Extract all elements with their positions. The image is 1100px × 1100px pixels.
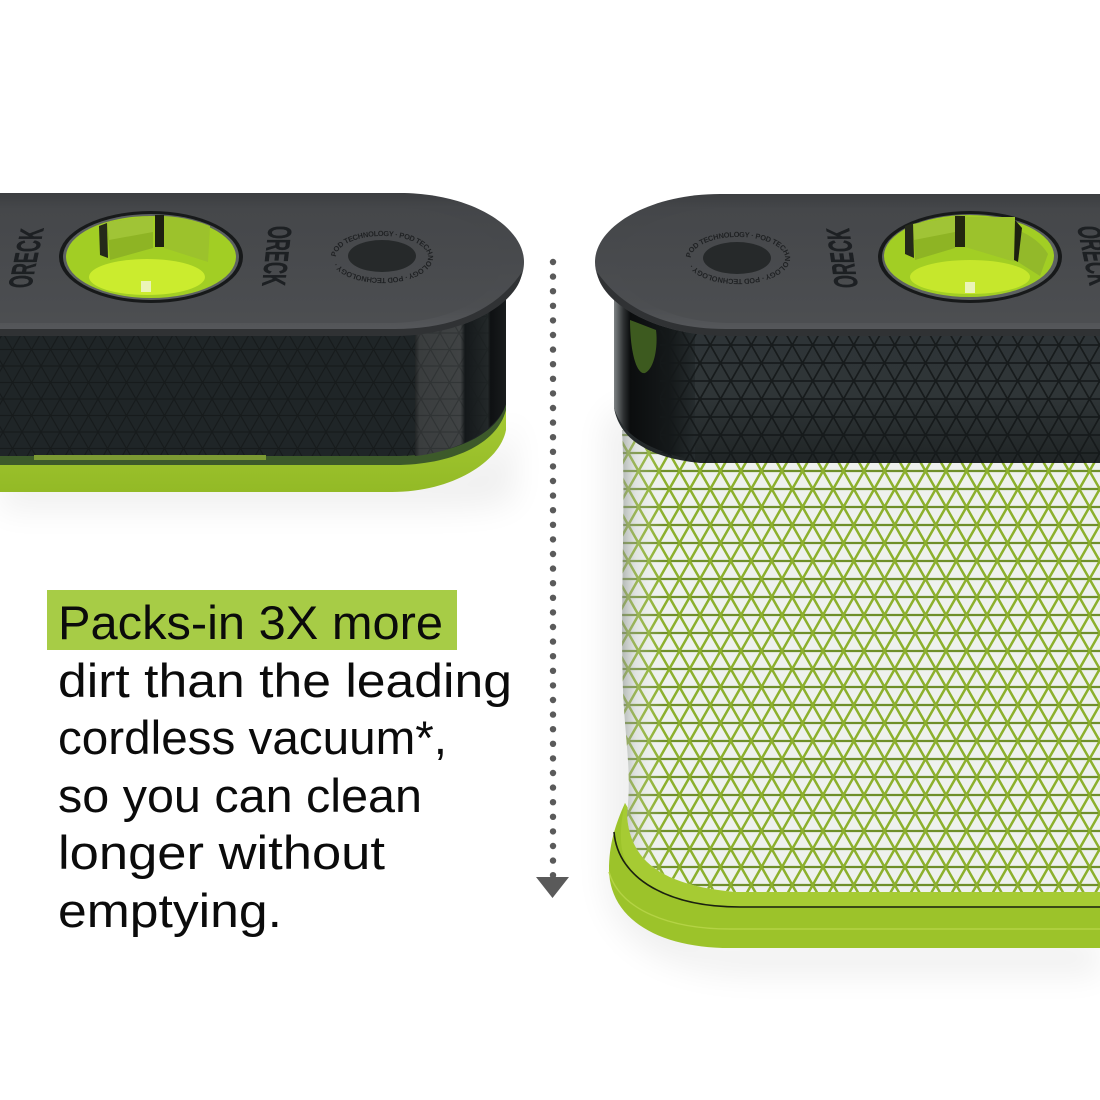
right pod technology badge: POD TECHNOLOGY · POD TECHNOLOGY · POD TECHNOLOGY · [686,232,790,284]
left pod window strip [34,455,266,460]
left pod green base [0,395,506,492]
main message text: emptying. [58,884,282,937]
right pod green base [609,803,1100,948]
left pod dark container [0,290,506,465]
main message text: longer without [58,826,385,879]
right pod (expanded) [595,194,1100,948]
main message text: Packs-in 3X more [58,596,443,649]
left pod (compressed) [0,193,524,492]
left pod technology badge: POD TECHNOLOGY · POD TECHNOLOGY · POD TECHNOLOGY · [331,230,434,284]
right recessed ring port [878,211,1062,303]
main message text: so you can clean [58,769,422,822]
main message text [58,596,512,937]
right ORECK logos: ORECK [820,228,866,288]
left pod lid [0,193,524,336]
left ORECK logos [2,226,298,288]
dotted downward arrow [536,262,569,898]
left ORECK logos: ORECK [2,228,52,288]
left recessed ring port [59,211,243,303]
soft shadows behind products [0,400,1100,975]
main message text: cordless vacuum*, [58,711,447,764]
main message text: dirt than the leading [58,654,512,707]
right ORECK logos [820,226,1100,288]
right pod lid [595,194,1100,336]
left ORECK logos: ORECK [254,226,298,286]
highlighted text background [47,590,457,650]
right pod dark container [614,270,1100,463]
right expanded filter bag with triangle pattern [622,430,1100,892]
